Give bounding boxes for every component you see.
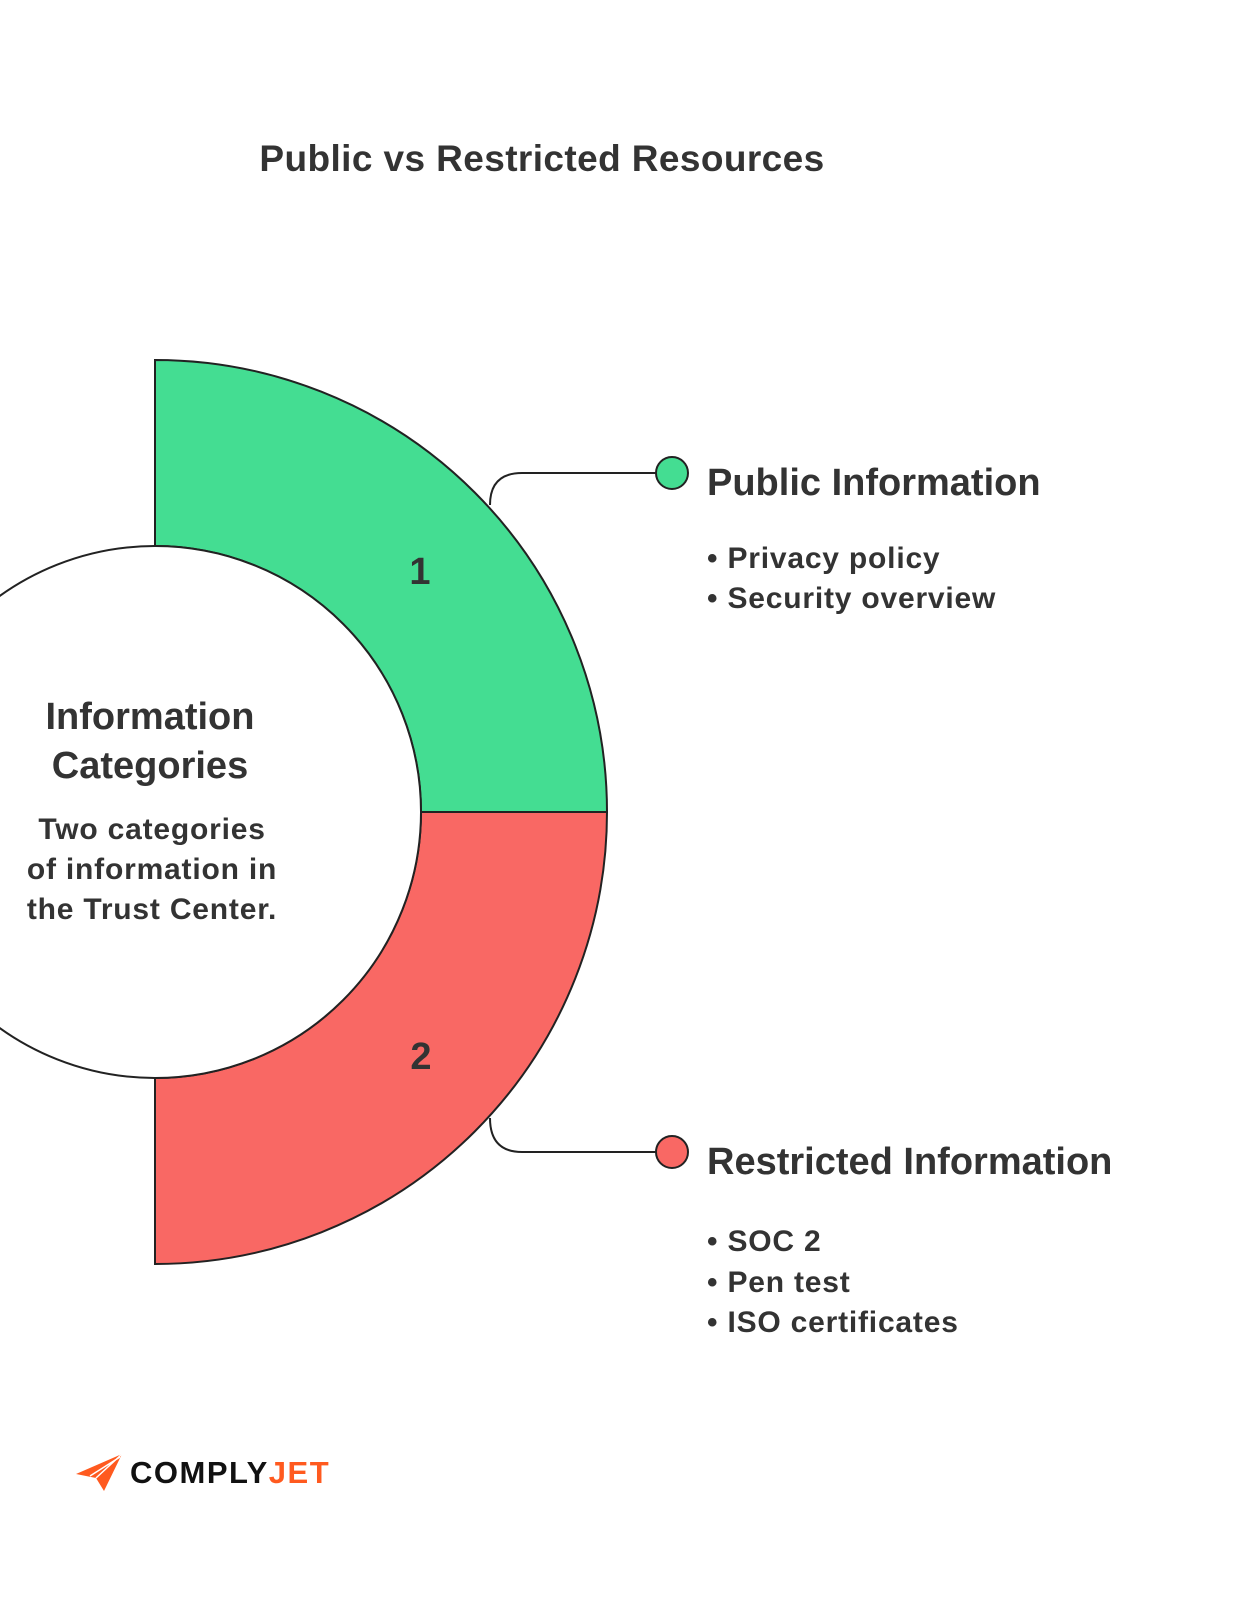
text block: public information: • Privacy policy bbox=[707, 542, 940, 575]
center text: Information bbox=[46, 696, 254, 738]
center text: Categories bbox=[52, 745, 248, 787]
text block: restricted information bbox=[707, 1141, 1112, 1339]
number 1: 1 bbox=[409, 551, 431, 593]
connector: public bbox=[490, 457, 688, 505]
segment: public (green) bbox=[155, 360, 607, 812]
center text: of information in bbox=[27, 853, 277, 886]
number 2: 2 bbox=[410, 1036, 432, 1078]
logo: complyjet: COMPLYJET bbox=[130, 1455, 330, 1490]
text block: public information: • Security overview bbox=[707, 582, 996, 615]
text block: restricted information: • SOC 2 bbox=[707, 1225, 821, 1258]
title: Public vs Restricted Resources bbox=[259, 138, 825, 179]
center text: the Trust Center. bbox=[27, 893, 277, 926]
segment: restricted (red) bbox=[155, 812, 607, 1264]
text block: restricted information: • Pen test bbox=[707, 1266, 851, 1299]
center text bbox=[27, 696, 277, 926]
text block: restricted information: Restricted Information bbox=[707, 1141, 1112, 1183]
center text: Two categories bbox=[38, 813, 266, 846]
connector: restricted bbox=[490, 1118, 688, 1168]
ring chart bbox=[0, 360, 607, 1264]
center circle bbox=[0, 546, 421, 1078]
text block: public information: Public Information bbox=[707, 462, 1041, 504]
text block: restricted information: • ISO certificates bbox=[707, 1306, 959, 1339]
text block: public information bbox=[707, 462, 1041, 615]
